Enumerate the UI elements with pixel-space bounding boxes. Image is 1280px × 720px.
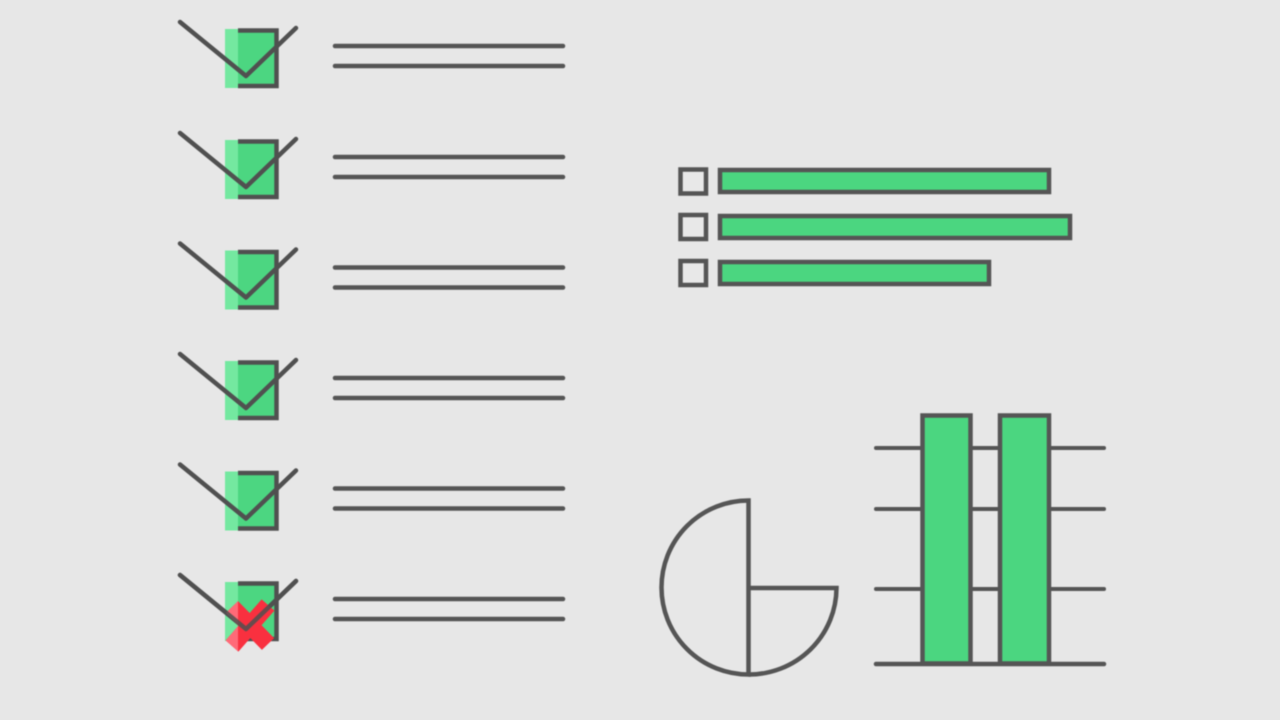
pie chart [661, 500, 836, 675]
column 2 [1000, 416, 1049, 664]
checklist row 1 [180, 22, 563, 88]
grid lines [876, 448, 1104, 664]
column 1 [922, 416, 970, 664]
checklist row 4 [180, 354, 563, 420]
checklist row 6 with red cross [180, 575, 563, 646]
checklist row 2 [180, 133, 563, 199]
bar row 3 [680, 261, 989, 285]
bar row 2 [680, 215, 1070, 239]
checklist [180, 22, 563, 646]
bar row 1 [680, 170, 1049, 194]
column chart [876, 416, 1104, 664]
checklist row 5 [180, 464, 563, 530]
icon: red cross [180, 575, 296, 646]
infographic canvas [177, 19, 1107, 678]
horizontal bar list [680, 170, 1070, 285]
checklist row 3 [180, 244, 563, 310]
